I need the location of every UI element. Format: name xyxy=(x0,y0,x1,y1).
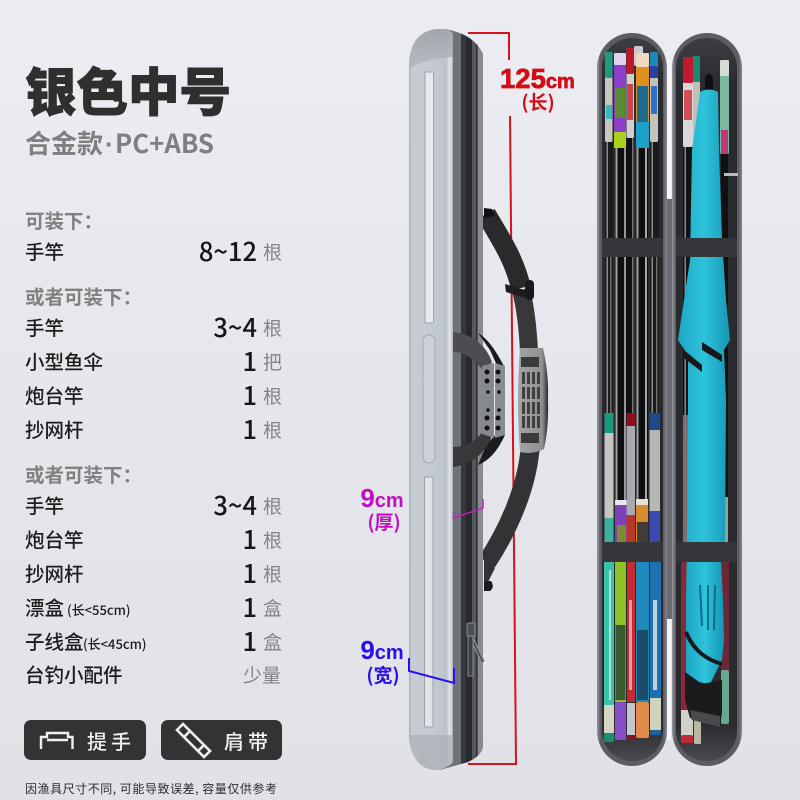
button: strap: 肩带 xyxy=(224,726,272,755)
title: 银色中号 xyxy=(25,51,231,126)
measure line: length xyxy=(468,33,516,764)
capacity list 1: 可装下： xyxy=(25,205,103,234)
button: handle: 提手 xyxy=(87,726,135,755)
shoulder strap xyxy=(484,208,534,591)
capacity list 3: (长<45cm) xyxy=(83,634,146,653)
umbrella ribs xyxy=(685,672,722,727)
shoulder pad xyxy=(518,348,548,453)
capacity list 3: 1 xyxy=(242,622,257,659)
capacity list 3: 或者可装下： xyxy=(25,459,142,488)
measure: width xyxy=(360,635,454,688)
capacity list 3: 抄网杆 xyxy=(25,558,84,587)
capacity list 3: 少量 xyxy=(243,661,281,688)
measure: width: (宽) xyxy=(366,661,400,688)
capacity list 2: 根 xyxy=(263,416,282,443)
umbrella skirt xyxy=(686,542,724,684)
capacity list 3: 根 xyxy=(263,492,282,519)
capacity list 3: 子线盒 xyxy=(25,626,84,655)
capacity list 2: 小型鱼伞 xyxy=(25,346,104,375)
rod handles lower xyxy=(604,562,661,742)
capacity list 3: 1 xyxy=(242,520,257,557)
subtitle: 合金款 xyxy=(25,124,103,161)
top cap shading xyxy=(409,29,453,70)
capacity list 2: 根 xyxy=(263,382,282,409)
measure label: length: 125cm xyxy=(500,63,575,94)
subtitle: PC+ABS xyxy=(115,124,214,161)
measure: width: 9cm xyxy=(360,635,404,665)
measure: thickness xyxy=(360,483,483,535)
black rods xyxy=(605,135,659,502)
rods xyxy=(681,56,738,744)
measure: thickness: (厚) xyxy=(367,508,401,535)
capacity list 2: 炮台竿 xyxy=(25,380,84,409)
measure label: length xyxy=(500,63,575,115)
fishing case side view xyxy=(409,29,548,771)
capacity list 3: 手竿 xyxy=(25,490,64,519)
capacity list 3: 盒 xyxy=(263,594,282,621)
capacity list 3: 1 xyxy=(242,554,257,591)
webbing loops xyxy=(478,333,505,372)
capacity list 3: (长<55cm) xyxy=(67,600,130,619)
capacity list 2: 根 xyxy=(263,314,282,341)
capacity list 3: 根 xyxy=(263,526,282,553)
capacity list 1: 8~12 xyxy=(199,232,257,269)
icon: shoulder strap xyxy=(177,724,210,757)
capacity list 2: 把 xyxy=(263,348,282,375)
carry handle xyxy=(482,363,505,438)
capacity list 1: 根 xyxy=(263,238,282,265)
measure label: length: (长) xyxy=(521,88,555,115)
capacity list 2: 1 xyxy=(242,376,257,413)
umbrella xyxy=(678,74,730,727)
rod labels middle xyxy=(604,413,660,542)
capacity list 3: 漂盒 xyxy=(25,592,65,621)
capacity list 3: 台钓小配件 xyxy=(25,659,123,688)
capacity list 2: 1 xyxy=(242,410,257,447)
capacity list 3: 炮台竿 xyxy=(25,524,84,553)
middle slot xyxy=(423,335,435,463)
button: strap xyxy=(161,720,282,760)
zipper pull xyxy=(467,623,483,676)
capacity list 3: 根 xyxy=(263,560,282,587)
capacity list 3: 3~4 xyxy=(213,486,257,523)
capacity list 1: 手竿 xyxy=(25,236,64,265)
upper slot xyxy=(425,72,434,323)
case front face xyxy=(409,29,453,770)
subtitle: · xyxy=(105,129,114,159)
retaining straps xyxy=(602,238,663,257)
capacity list 3 xyxy=(25,459,282,688)
panel: left compartment xyxy=(597,33,667,766)
bottom cap shading xyxy=(409,735,453,770)
measure: thickness: 9cm xyxy=(360,483,404,513)
lower slot xyxy=(424,477,433,727)
capacity list 2: 3~4 xyxy=(213,308,257,345)
capacity list 2: 1 xyxy=(242,342,257,379)
panel: right compartment xyxy=(672,33,742,766)
capacity list 2 xyxy=(25,281,282,447)
rod labels upper xyxy=(605,46,658,148)
button: handle xyxy=(24,720,146,760)
capacity list 1 xyxy=(25,205,282,269)
case side panel xyxy=(440,29,484,771)
retaining straps xyxy=(676,238,737,257)
capacity list 2: 或者可装下： xyxy=(25,281,142,310)
footnote: 因渔具尺寸不同, 可能导致误差, 容量仅供参考 xyxy=(25,780,277,797)
capacity list 3: 盒 xyxy=(263,628,282,655)
capacity list 3: 1 xyxy=(242,588,257,625)
capacity list 2: 手竿 xyxy=(25,312,64,341)
connector between compartments xyxy=(667,60,673,740)
capacity list 2: 抄网杆 xyxy=(25,414,84,443)
icon: handle xyxy=(41,733,72,749)
